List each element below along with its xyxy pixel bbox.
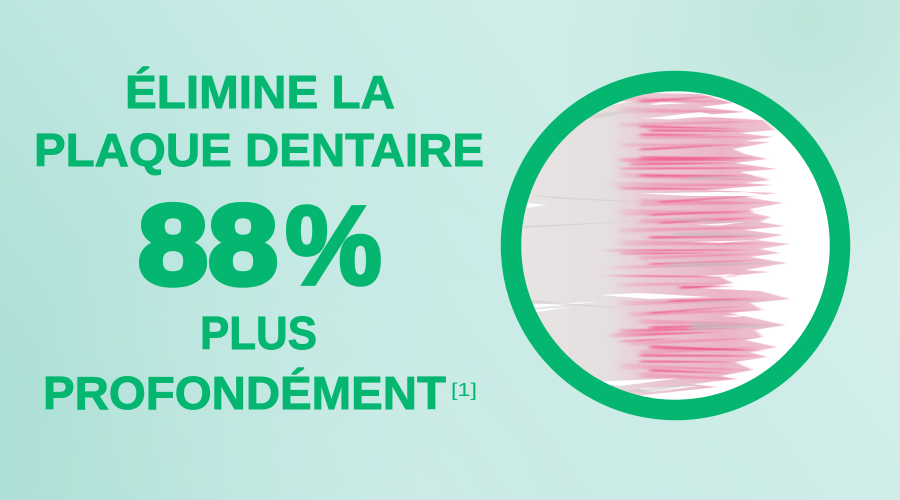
footnote reference: [1] <box>451 380 477 400</box>
white gaps between bristles <box>526 100 775 392</box>
white circle backing <box>520 90 832 402</box>
big number: 88%: 88 <box>138 182 278 308</box>
circular bristle illustration <box>511 81 840 410</box>
bright pink bristle streaks <box>590 96 770 373</box>
big number: 88% <box>138 182 382 308</box>
big number: 88%: % <box>285 183 382 308</box>
thin white gaps over streaks <box>642 118 765 317</box>
green ring <box>511 81 840 410</box>
heading: élimine la plaque dentaire: ÉLIMINE LA <box>125 66 395 118</box>
grey bristle streaks <box>665 177 790 330</box>
toothbrush bristles <box>515 92 790 400</box>
subheading: plus profondément: PROFONDÉMENT <box>43 367 446 419</box>
faint grey strands on the left <box>525 106 710 393</box>
subheading: plus profondément: PLUS <box>200 307 317 359</box>
pale pink bristle streaks <box>612 96 770 380</box>
heading: élimine la plaque dentaire <box>34 66 484 176</box>
bristle body <box>515 92 790 400</box>
heading: élimine la plaque dentaire: PLAQUE DENTAIRE <box>34 124 484 176</box>
subheading: plus profondément <box>43 307 446 419</box>
